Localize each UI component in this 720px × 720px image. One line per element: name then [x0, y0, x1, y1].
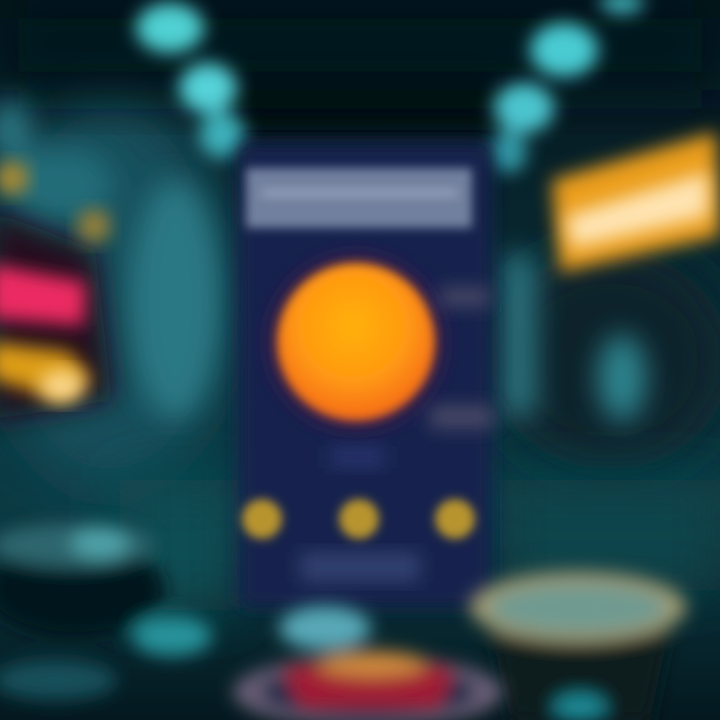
phone	[238, 142, 494, 608]
footer text	[300, 552, 420, 582]
bottom centre bowl	[233, 606, 503, 720]
bottom left bowl	[0, 523, 212, 700]
phone heading block	[246, 168, 472, 228]
right yellow sign	[552, 132, 720, 272]
left teal building glow	[0, 98, 220, 420]
right teal column glow	[502, 255, 646, 422]
circle halo	[268, 254, 444, 430]
three gold icons	[242, 499, 475, 539]
orange circle	[277, 263, 435, 421]
ceiling lights: right	[489, 0, 644, 173]
side labels	[430, 288, 494, 428]
ceiling lights: left	[136, 3, 245, 158]
caption under circle	[330, 446, 385, 468]
left neon sign	[0, 161, 112, 420]
bottom right bowl	[470, 572, 686, 720]
